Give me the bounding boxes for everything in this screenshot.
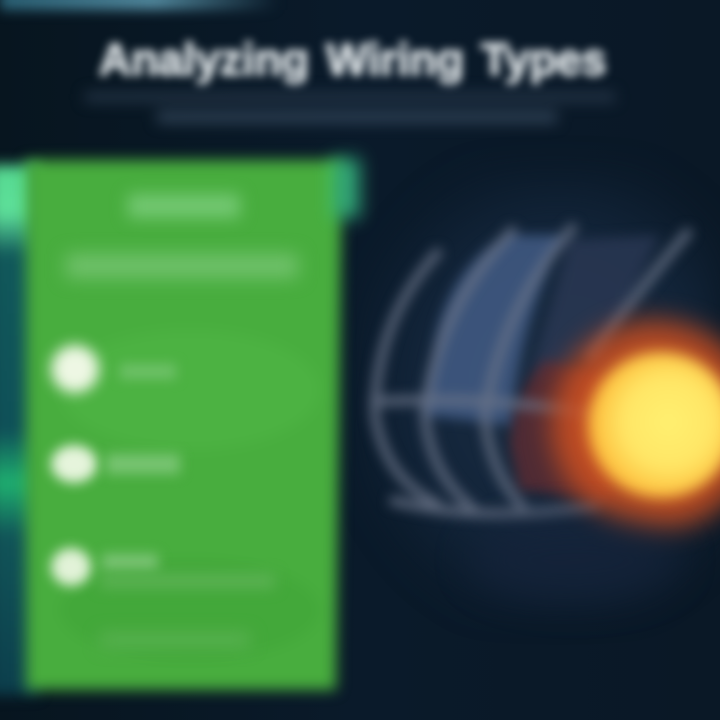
globe dark red fill (510, 360, 620, 500)
list item 2 (42, 436, 186, 492)
label 2 (106, 454, 180, 474)
card description (66, 254, 298, 278)
card top right glow (332, 158, 360, 218)
icon: bright sun (588, 352, 720, 498)
list item 1 (41, 335, 180, 403)
globe dark fill (530, 235, 660, 380)
label 3 (102, 554, 158, 570)
icon: bullet 2 (51, 445, 97, 483)
chart: wire globe (364, 219, 696, 525)
left edge teal strip (0, 165, 38, 695)
subtitle (84, 88, 614, 129)
panel: green card (16, 150, 352, 700)
title: Analyzing Wiring Types (99, 34, 606, 85)
globe blue fill (420, 235, 565, 425)
label 1 (120, 364, 176, 379)
globe wire lines (370, 225, 690, 514)
globe lower shadow glow (470, 520, 680, 600)
icon: bullet 3 (51, 548, 91, 586)
list item 3 description (100, 574, 275, 588)
list item 3 (42, 540, 164, 594)
sun glow (545, 315, 720, 535)
background glow (360, 170, 720, 610)
card footer text (100, 632, 250, 648)
top edge band (0, 0, 280, 10)
card heading (128, 194, 240, 218)
icon: bullet 1 (51, 345, 99, 393)
